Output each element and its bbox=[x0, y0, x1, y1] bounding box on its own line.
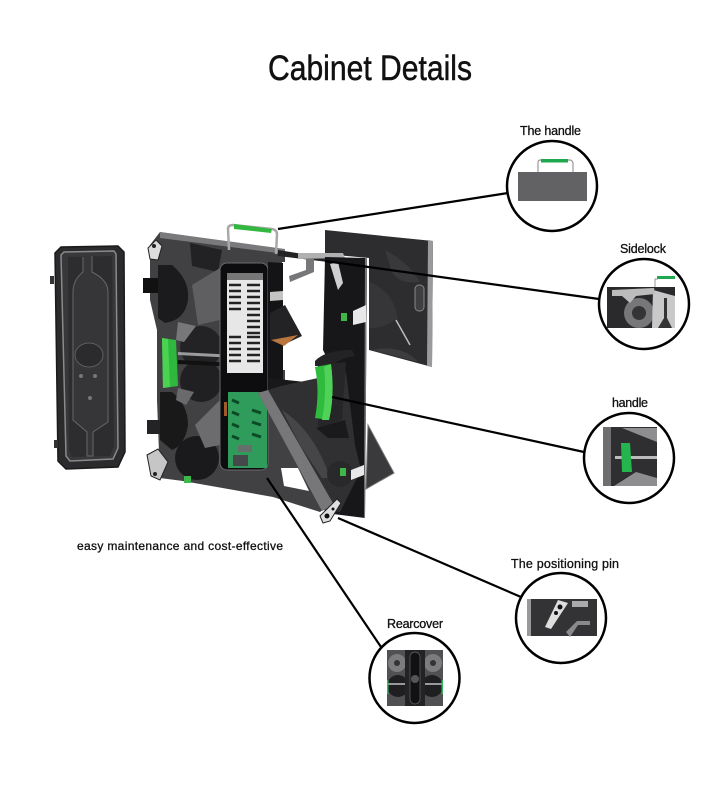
cabinet frame left section bbox=[150, 232, 330, 512]
thumbnail: LED panel with handle bbox=[518, 159, 587, 201]
callout: the handle bbox=[507, 124, 597, 231]
callout: handle bbox=[584, 396, 674, 503]
green left handle bbox=[162, 338, 178, 388]
bracket and black box beside the power supply bbox=[268, 253, 345, 400]
thumbnail: rear cover detail bbox=[387, 650, 443, 706]
callout: sidelock: Sidelock bbox=[620, 242, 667, 256]
callout: rearcover bbox=[370, 617, 460, 723]
caption: easy maintenance and cost-effective bbox=[77, 539, 283, 553]
title: Cabinet Details bbox=[268, 49, 472, 88]
icon: removed rear cover bbox=[50, 246, 125, 469]
callout: the handle: The handle bbox=[520, 124, 581, 138]
icon: tilted rear cover plate bbox=[258, 362, 364, 512]
icon: positioning pin bbox=[320, 499, 341, 523]
callout: handle: handle bbox=[612, 396, 648, 410]
white gap below the circuit board bbox=[281, 468, 309, 491]
callout: the positioning pin: The positioning pin bbox=[511, 557, 619, 571]
leader line: the handle bbox=[278, 193, 508, 229]
callout: rearcover: Rearcover bbox=[387, 617, 443, 631]
icon: right hinged frame bbox=[323, 257, 367, 518]
back panel: lower right module bbox=[366, 425, 394, 489]
back panel: upper right module bbox=[325, 230, 433, 367]
frame top edge bbox=[160, 232, 285, 254]
icon: power supply compartment bbox=[220, 263, 268, 470]
leader line: rearcover bbox=[267, 478, 381, 647]
icon: top carry handle bbox=[228, 224, 277, 254]
leader line: handle bbox=[332, 397, 584, 452]
small green clip bottom left bbox=[184, 476, 191, 483]
callout: the positioning pin bbox=[511, 557, 619, 663]
left brackets bbox=[148, 240, 162, 260]
round black drums bbox=[158, 265, 188, 323]
leader line: positioning pin bbox=[338, 518, 521, 597]
thumbnail: positioning pin detail bbox=[527, 599, 597, 637]
leader line: sidelock bbox=[325, 261, 599, 299]
callout: sidelock bbox=[599, 242, 689, 349]
icon: green side handle bbox=[315, 350, 355, 420]
driver circuit board bbox=[224, 392, 267, 468]
icon: cabinet body bbox=[143, 232, 330, 512]
thumbnail: green handle detail bbox=[603, 427, 657, 486]
power supply unit bbox=[227, 273, 263, 373]
thumbnail: sidelock detail bbox=[607, 276, 675, 328]
